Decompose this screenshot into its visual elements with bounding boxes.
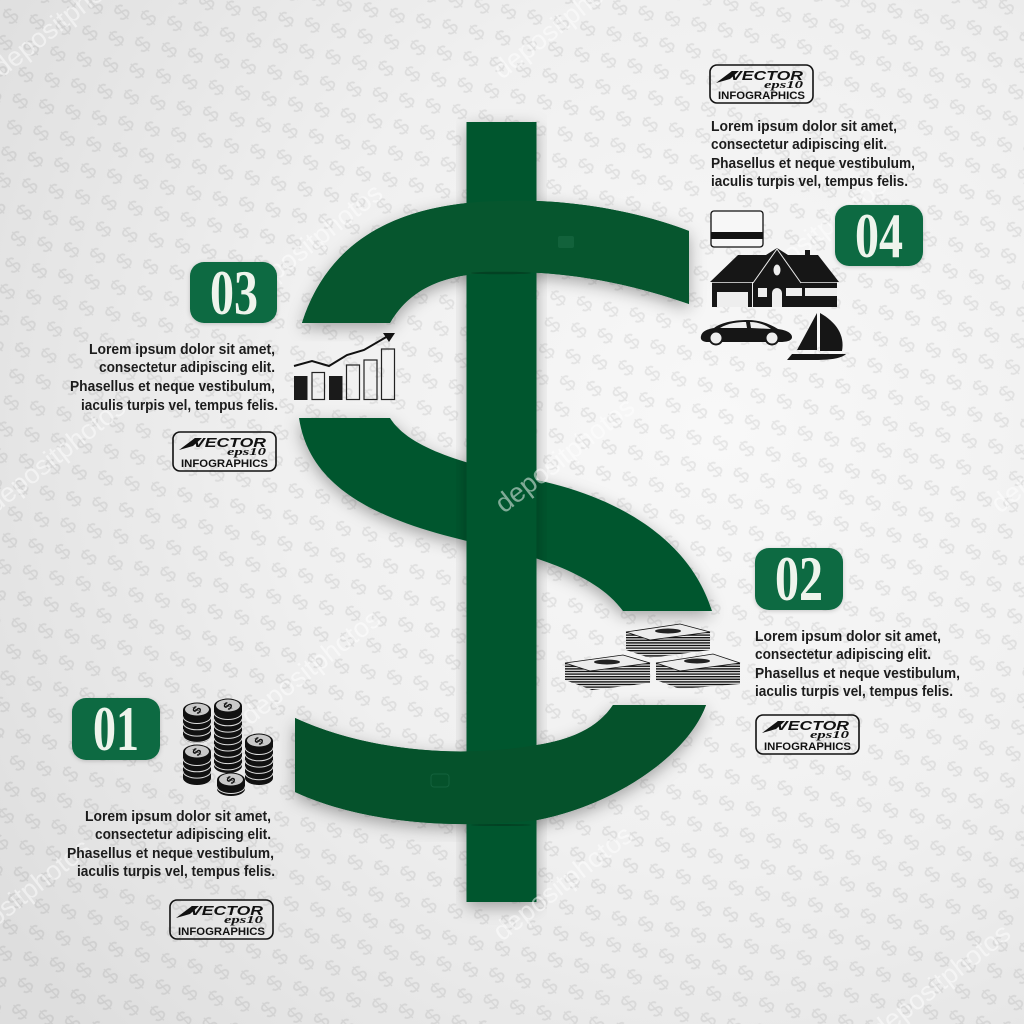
badge 04: 04 — [855, 200, 903, 271]
badge 02: 02 — [775, 543, 823, 614]
icon: car — [701, 320, 792, 344]
badge 03: 03 — [210, 257, 258, 328]
logo 02: INFOGRAPHICS — [764, 741, 851, 753]
logo 02: eps10 — [810, 730, 849, 741]
watermarks: depositphotos — [487, 820, 638, 947]
logo 02 — [756, 715, 859, 754]
bill stack top — [626, 624, 710, 658]
top curve shadow — [302, 201, 689, 323]
logo 04: VECTOR — [730, 68, 804, 83]
logo 03: eps10 — [227, 447, 266, 458]
text block 01: Lorem ipsum dolor sit amet, — [85, 809, 271, 825]
text block 03 — [70, 342, 278, 414]
middle curve — [299, 418, 712, 611]
coin stack right: $ — [251, 734, 267, 747]
coin stack small: $ — [223, 773, 239, 786]
logo 01: VECTOR — [190, 903, 264, 918]
watermarks: depositphotos — [237, 178, 388, 305]
icon: house — [710, 248, 839, 307]
coin stack tall: $ — [220, 699, 236, 712]
watermarks: depositphotos — [235, 604, 386, 731]
icon: credit card — [711, 211, 763, 247]
text block 04: consectetur adipiscing elit. — [711, 137, 887, 153]
coin stack left top: $ — [189, 703, 205, 716]
logo 03: INFOGRAPHICS — [181, 458, 268, 470]
icon: coins — [183, 698, 273, 796]
watermark camera on green — [558, 236, 574, 248]
bill stack left — [565, 655, 650, 690]
top curve — [302, 201, 689, 323]
text block 01: consectetur adipiscing elit. — [95, 827, 271, 843]
watermarks: depositphotos — [741, 170, 892, 297]
logo 01: INFOGRAPHICS — [178, 926, 265, 938]
text block 02: Lorem ipsum dolor sit amet, — [755, 629, 941, 645]
text block 01 — [67, 809, 275, 880]
text block 02: consectetur adipiscing elit. — [755, 647, 931, 663]
badge 01: 01 — [93, 693, 139, 764]
bottom curve — [295, 705, 706, 824]
logo 03 — [173, 432, 276, 471]
icon: growth chart — [294, 333, 395, 400]
text block 03: Lorem ipsum dolor sit amet, — [89, 342, 275, 358]
text block 03: consectetur adipiscing elit. — [99, 360, 275, 376]
dollar sign — [295, 122, 712, 902]
logo 04: INFOGRAPHICS — [718, 90, 805, 102]
logo 03: VECTOR — [193, 435, 267, 450]
icon: sailboat — [787, 313, 846, 360]
vertical bar — [466, 122, 536, 902]
logo 04 — [710, 65, 813, 103]
bottom curve shadow — [295, 705, 706, 824]
text block 03: Phasellus et neque vestibulum, — [70, 379, 275, 395]
text block 02 — [755, 629, 960, 700]
text block 01: iaculis turpis vel, tempus felis. — [77, 864, 275, 880]
watermarks: depositphotos — [489, 392, 640, 519]
text block 03: iaculis turpis vel, tempus felis. — [81, 398, 278, 414]
icon: money stacks — [565, 624, 740, 690]
text block 04: Lorem ipsum dolor sit amet, — [711, 119, 897, 135]
text block 04 — [711, 119, 915, 190]
text block 04: Phasellus et neque vestibulum, — [711, 156, 915, 172]
logo 01 — [170, 900, 273, 939]
coin stack left bottom: $ — [189, 745, 205, 758]
text block 01: Phasellus et neque vestibulum, — [67, 846, 274, 862]
logo 01: eps10 — [224, 915, 263, 926]
logo 02: VECTOR — [776, 718, 850, 733]
logo 04: eps10 — [764, 80, 803, 91]
text block 02: Phasellus et neque vestibulum, — [755, 666, 960, 682]
bill stack right — [656, 654, 740, 689]
text block 02: iaculis turpis vel, tempus felis. — [755, 684, 953, 700]
text block 04: iaculis turpis vel, tempus felis. — [711, 174, 908, 190]
fold shading — [471, 272, 531, 826]
